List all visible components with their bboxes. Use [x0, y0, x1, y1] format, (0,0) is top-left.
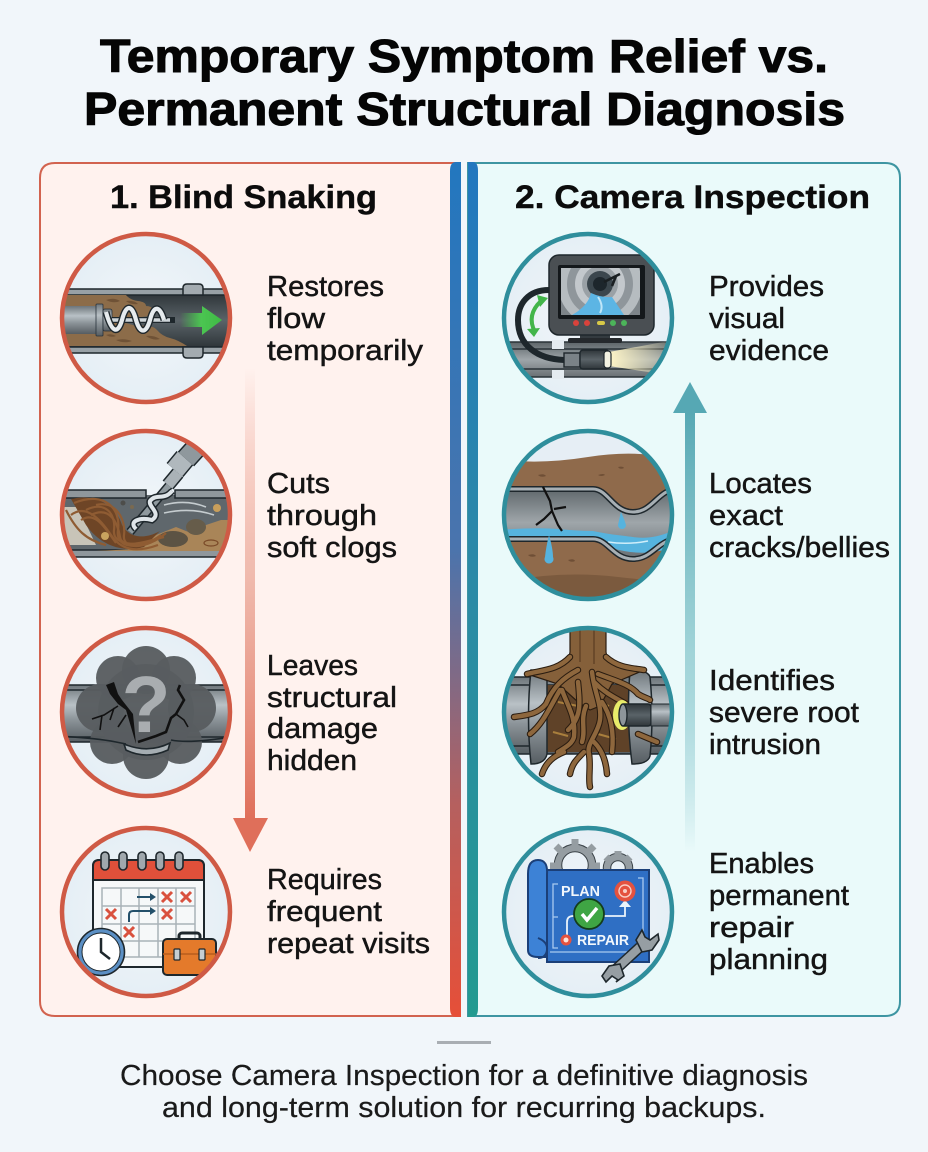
text: identifies severe root intrusion: [709, 665, 859, 761]
icon: repair plan blueprint: PLAN: [561, 883, 600, 900]
text: enables permanent repair planning: repair: [709, 912, 795, 944]
text: restores flow temporarily: flow: [267, 303, 325, 335]
icon: root intrusion: [498, 622, 681, 798]
title: Temporary Symptom Relief vs.: [100, 30, 828, 82]
text: leaves structural damage hidden: [267, 650, 397, 777]
text: cuts through soft clogs: [267, 468, 397, 564]
text: locates exact cracks/bellies: [709, 468, 890, 564]
text: identifies severe root intrusion: Identifies: [709, 665, 835, 697]
text: identifies severe root intrusion: intrusion: [709, 729, 821, 761]
footer conclusion text: Choose Camera Inspection for a definitive diagnosis: [120, 1060, 808, 1092]
divider: right blue-to-teal bar: [468, 162, 478, 1017]
text: provides visual evidence: visual: [709, 303, 785, 335]
divider: left blue-to-red bar: [450, 162, 461, 1017]
heading: camera inspection: 2. Camera Inspection: [515, 179, 870, 215]
icon: auger restoring flow: [56, 232, 236, 404]
text: leaves structural damage hidden: damage: [267, 713, 378, 745]
icon: auger cutting soft clog: [60, 428, 232, 602]
text: requires frequent repeat visits: [267, 864, 430, 960]
footer rule: [437, 1041, 491, 1044]
text: restores flow temporarily: Restores: [267, 271, 384, 303]
text: leaves structural damage hidden: hidden: [267, 745, 357, 777]
icon: hidden structural damage: [56, 626, 236, 798]
text: leaves structural damage hidden: structural: [267, 682, 397, 714]
text: locates exact cracks/bellies: exact: [709, 500, 783, 532]
panel: camera inspection background: [468, 163, 900, 1016]
text: cuts through soft clogs: through: [267, 500, 377, 532]
text: locates exact cracks/bellies: Locates: [709, 468, 812, 500]
text: requires frequent repeat visits: Requires: [267, 864, 382, 896]
icon: repair plan blueprint: [502, 826, 674, 998]
panel: blind snaking background: [40, 163, 460, 1016]
text: provides visual evidence: [709, 271, 829, 367]
arrow: upward teal: [673, 382, 707, 852]
text: requires frequent repeat visits: frequent: [267, 896, 382, 928]
text: cuts through soft clogs: Cuts: [267, 468, 330, 500]
text: provides visual evidence: evidence: [709, 335, 829, 367]
title: Permanent Structural Diagnosis: [84, 83, 845, 135]
icon: inspection monitor and camera: [498, 232, 678, 404]
footer conclusion text: and long-term solution for recurring backups.: [162, 1092, 766, 1124]
text: provides visual evidence: Provides: [709, 271, 824, 303]
text: requires frequent repeat visits: repeat visits: [267, 928, 430, 960]
text: enables permanent repair planning: planning: [709, 944, 828, 976]
icon: repair plan blueprint: REPAIR: [577, 932, 629, 949]
text: cuts through soft clogs: soft clogs: [267, 532, 397, 564]
text: locates exact cracks/bellies: cracks/bellies: [709, 532, 890, 564]
text: restores flow temporarily: temporarily: [267, 335, 424, 367]
text: enables permanent repair planning: [709, 848, 849, 976]
text: restores flow temporarily: [267, 271, 424, 367]
icon: hidden structural damage: ?: [122, 660, 170, 749]
text: identifies severe root intrusion: severe root: [709, 697, 859, 729]
icon: calendar of repeat visits: [60, 826, 232, 998]
text: enables permanent repair planning: permanent: [709, 880, 849, 912]
icon: cracked pipe with belly: [498, 425, 678, 605]
text: leaves structural damage hidden: Leaves: [267, 650, 358, 682]
heading: blind snaking: 1. Blind Snaking: [110, 179, 377, 215]
arrow: downward red: [233, 368, 268, 852]
footer conclusion text: [120, 1060, 808, 1124]
title: [84, 30, 845, 135]
text: enables permanent repair planning: Enables: [709, 848, 814, 880]
